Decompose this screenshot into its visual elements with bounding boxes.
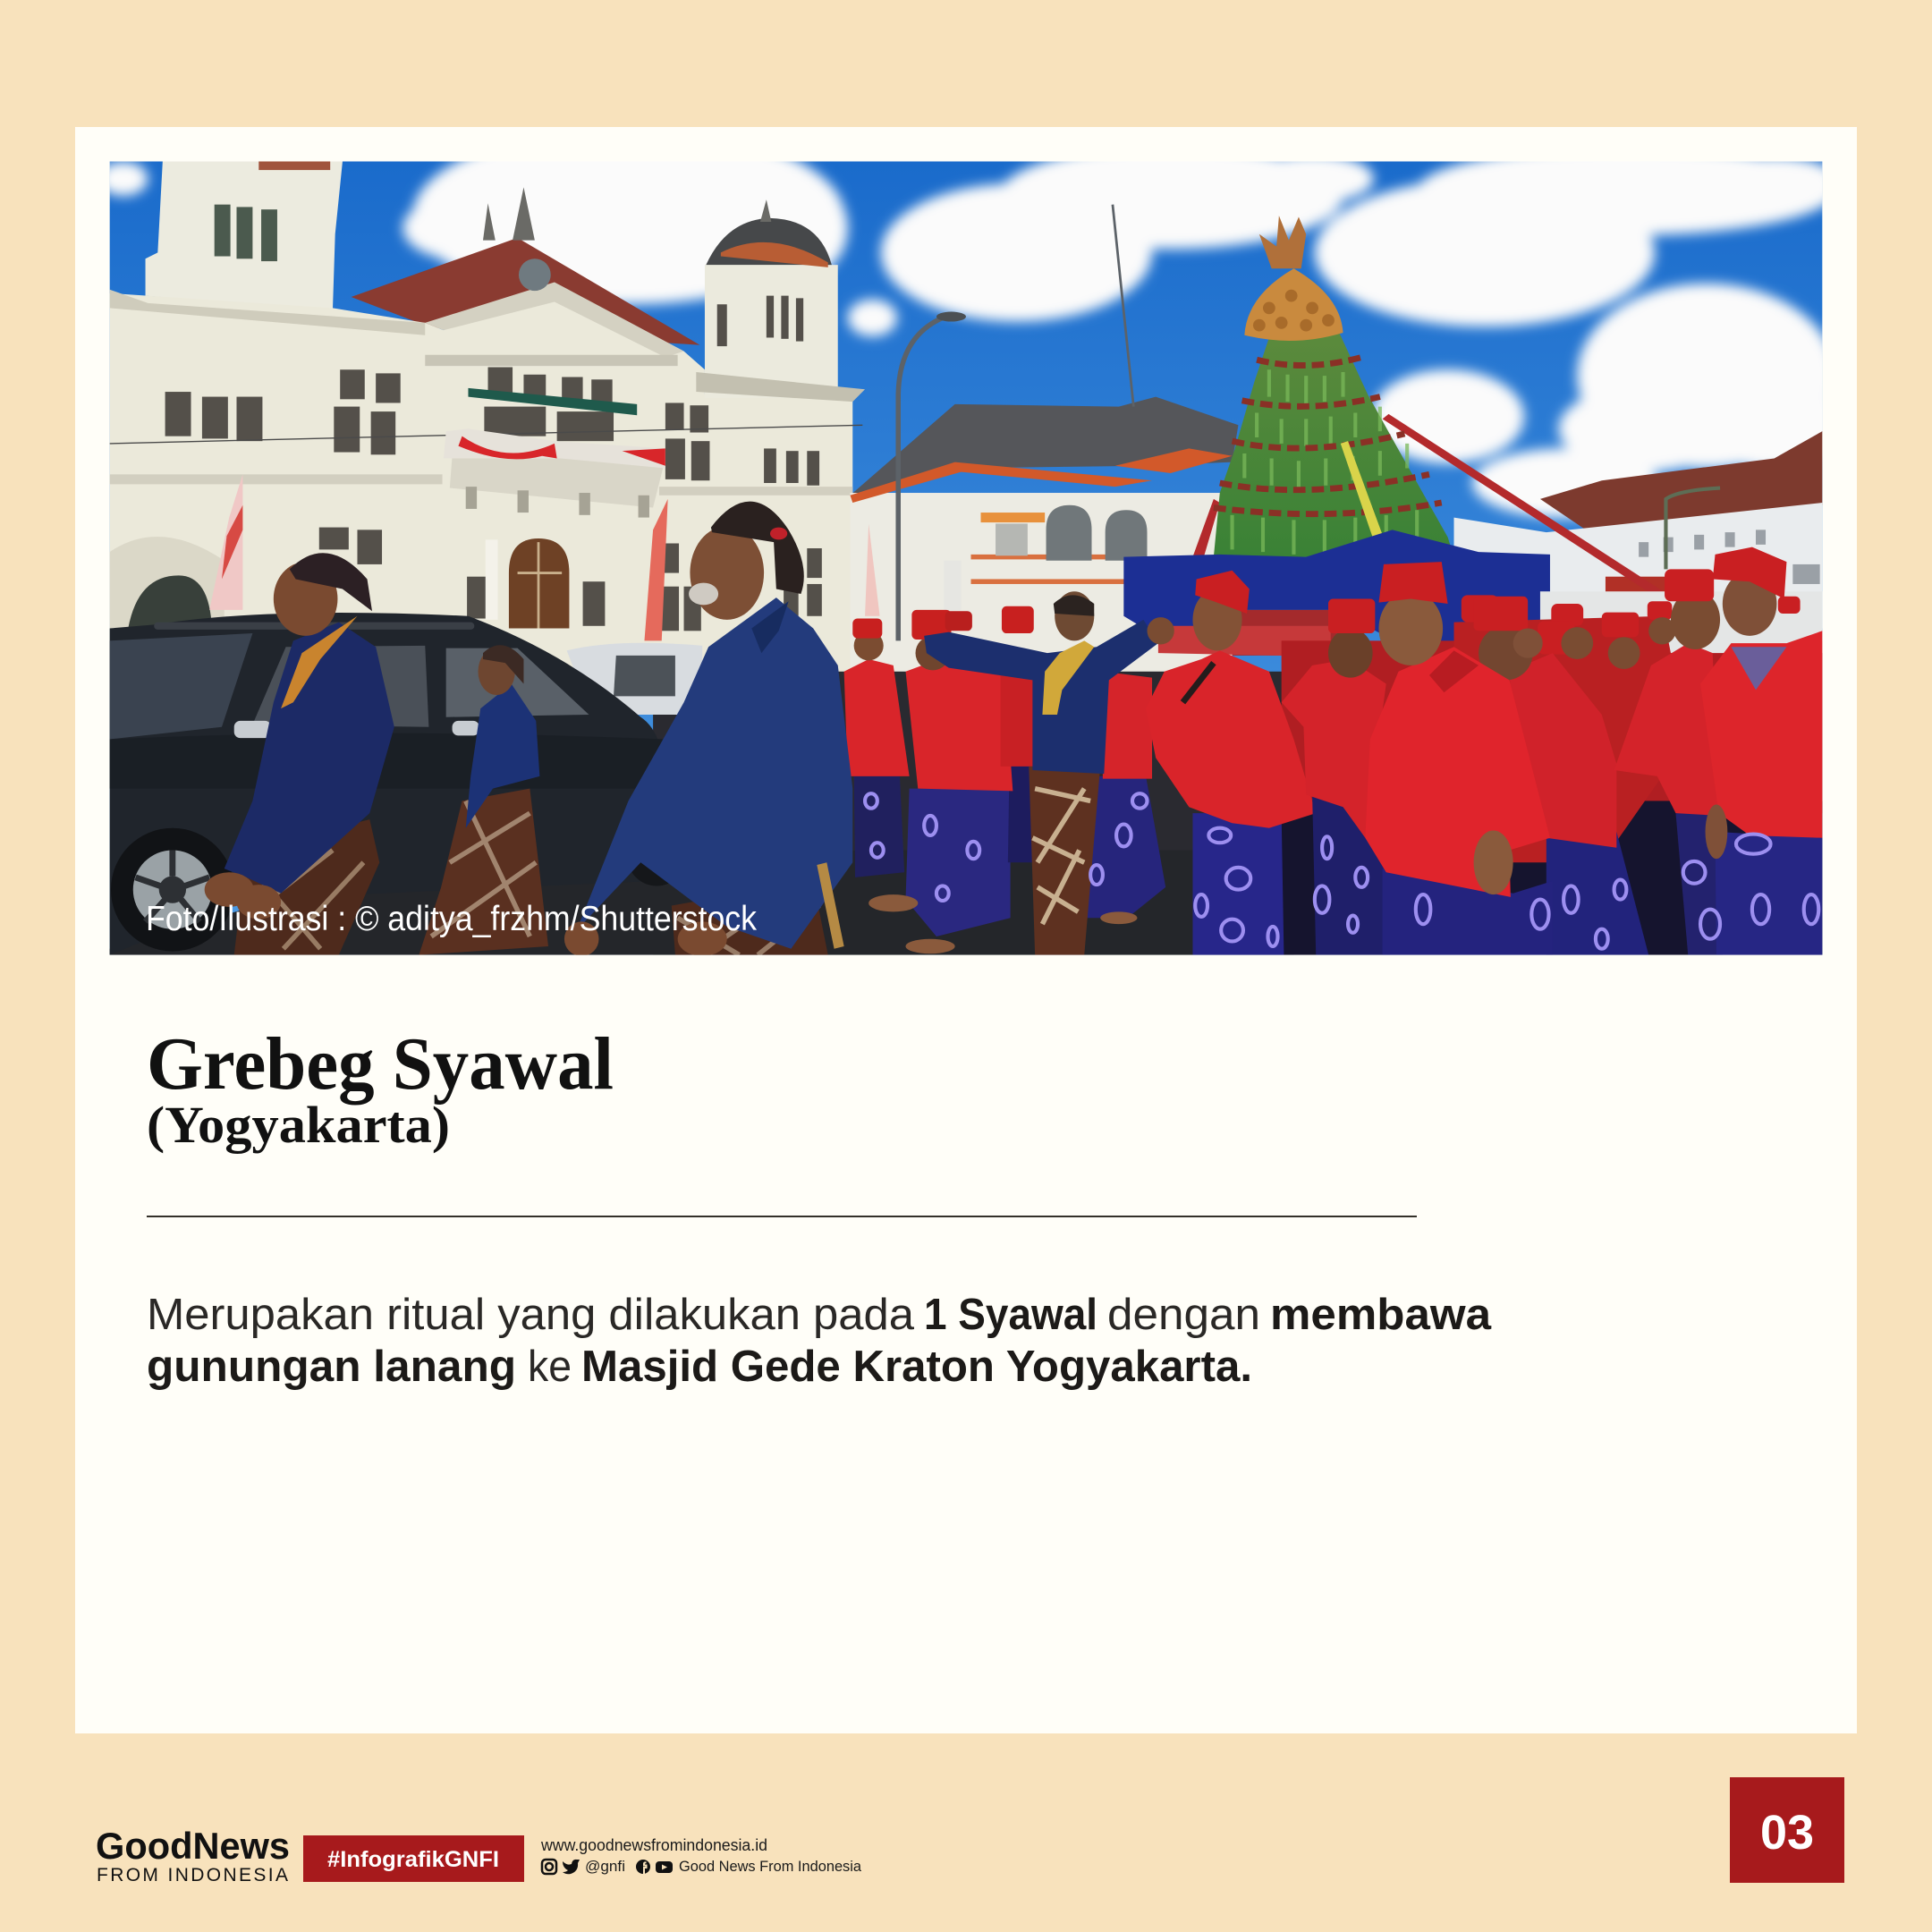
logo: GoodNews From Indonesia: GoodNews [96, 1825, 290, 1867]
figure: small walking man [419, 645, 548, 955]
main white building [110, 161, 865, 690]
page number badge [1730, 1777, 1844, 1883]
blue cloth platform [1123, 530, 1550, 657]
hashtag badge [303, 1835, 524, 1882]
figure: blue-shirted man left [205, 553, 394, 955]
website: www.goodnewsfromindonesia.id [540, 1836, 767, 1854]
figure: large blue-shirted man front [564, 502, 852, 956]
body text: 1 Syawal [924, 1291, 1097, 1339]
ground and crowd backdrop [653, 591, 1822, 955]
street lamp and antenna [898, 205, 1133, 640]
photo: Grebeg Syawal procession [98, 127, 1848, 956]
gunungan: red support pole [1383, 413, 1640, 577]
icon: twitter [563, 1860, 580, 1874]
logo: GoodNews From Indonesia [96, 1825, 290, 1885]
icon: youtube [656, 1861, 673, 1873]
tie-dye rings on trousers [865, 793, 1818, 949]
body text [147, 1291, 1492, 1391]
hashtag badge: #InfografikGNFI [327, 1847, 499, 1872]
black car [110, 613, 686, 955]
body text: Masjid Gede Kraton Yogyakarta. [581, 1343, 1252, 1391]
body text: dengan [1107, 1291, 1260, 1339]
icon: facebook [636, 1860, 650, 1874]
panel: white card [75, 127, 1857, 1733]
figure: central blue-shirted leader [924, 591, 1174, 955]
divider [147, 1216, 1417, 1217]
gunungan: green cone with chili bands [1214, 216, 1454, 557]
far right red-roofed building [1454, 431, 1822, 629]
silver car [567, 643, 702, 715]
figure: red-shirted men on left [844, 606, 1165, 953]
background crowd red caps and shirts [1454, 595, 1801, 862]
road [109, 882, 1281, 955]
right white building [851, 397, 1238, 702]
body text: gunungan lanang [147, 1343, 516, 1391]
figures: red-shirted bearers on right [1146, 547, 1822, 955]
body text: Merupakan ritual yang dilakukan pada [147, 1291, 915, 1339]
subtitle: (Yogyakarta) [147, 1096, 450, 1154]
page number badge: 03 [1760, 1806, 1814, 1860]
social name: Good News From Indonesia [679, 1858, 862, 1875]
photo credit: Foto/Ilustrasi : © aditya_frzhm/Shutterstock [146, 900, 757, 938]
logo: GoodNews From Indonesia: FROM INDONESIA [97, 1865, 288, 1885]
title: Grebeg Syawal [147, 1022, 614, 1106]
social handle: @gnfi [585, 1858, 625, 1875]
body text: membawa [1270, 1291, 1492, 1339]
body text: ke [528, 1343, 572, 1391]
icon: instagram [542, 1860, 556, 1874]
